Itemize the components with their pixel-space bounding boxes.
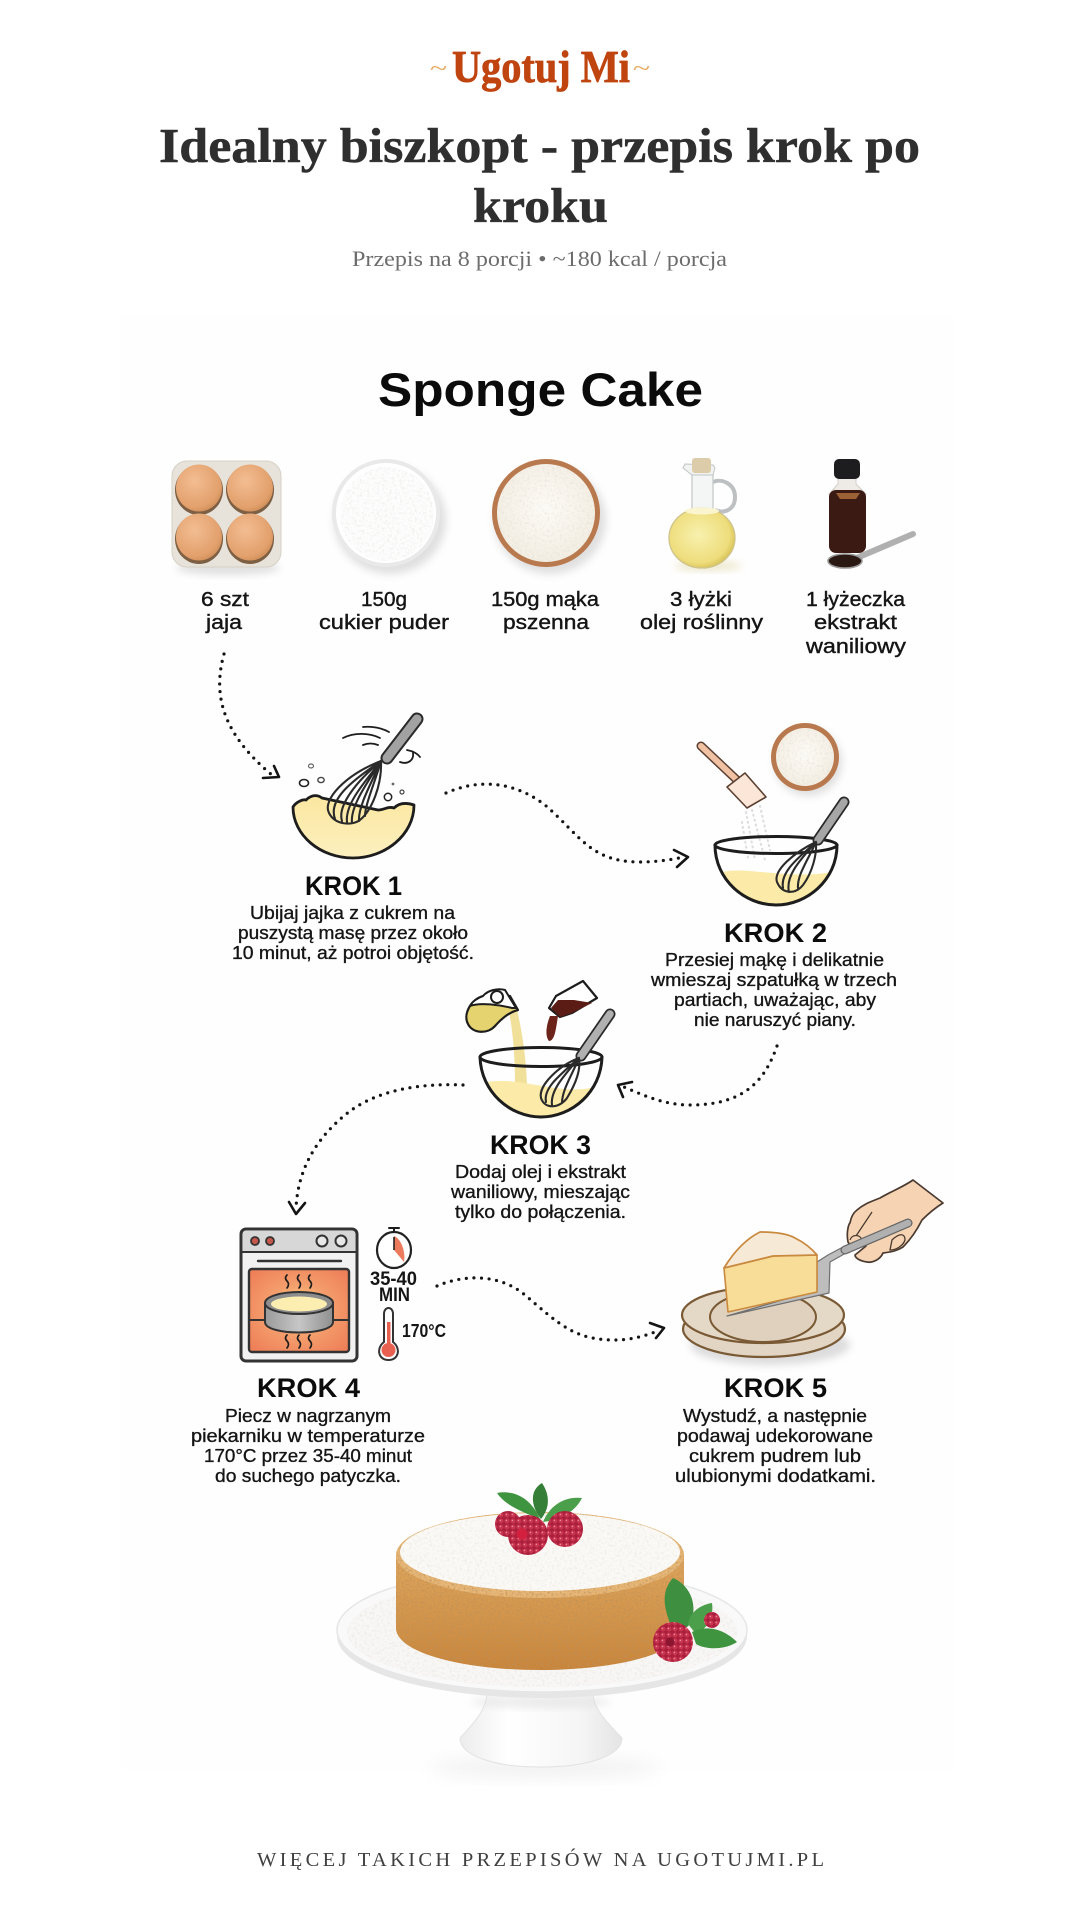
icon: timer 35-40 min: 35-40 <box>370 1269 417 1290</box>
step 3 text: Dodaj olej i ekstrakt <box>455 1161 626 1182</box>
arrow: step 2 to step 3 <box>618 1046 777 1105</box>
step 3 text: waniliowy, mieszając <box>450 1181 630 1202</box>
step 4 text: KROK 4 <box>257 1373 360 1403</box>
step 5 text: KROK 5 <box>724 1373 827 1403</box>
ingredient label: oil: olej roślinny <box>640 612 763 634</box>
step 5 text: podawaj udekorowane <box>677 1425 873 1446</box>
ingredient label: flour: 150g mąka <box>491 589 600 611</box>
step 5 text: Wystudź, a następnie <box>683 1405 867 1426</box>
icon: step 5 cake slice served by hand <box>682 1180 943 1365</box>
ingredient label: sugar: cukier puder <box>319 612 449 634</box>
arrow: step 4 to step 5 <box>437 1278 664 1340</box>
icon: vanilla extract with spoon <box>828 459 913 568</box>
step 1 text <box>232 871 474 963</box>
step 3 text: KROK 3 <box>490 1130 591 1160</box>
logo: Ugotuj Mi: Ugotuj Mi <box>452 41 630 92</box>
ingredient label: oil <box>640 589 763 634</box>
icon: timer 35-40 min: MIN <box>379 1285 410 1306</box>
ingredient label: vanilla: ekstrakt <box>814 612 898 634</box>
step 2 text: nie naruszyć piany. <box>694 1009 856 1030</box>
ingredient label: vanilla: waniliowy <box>805 636 906 658</box>
step 4 text: piekarniku w temperaturze <box>191 1425 425 1446</box>
title <box>159 118 920 233</box>
step 1 text: Ubijaj jajka z cukrem na <box>250 902 456 923</box>
step 3 text <box>450 1130 630 1222</box>
step 4 text: Piecz w nagrzanym <box>225 1405 391 1426</box>
icon: step 2 sifting flour into bowl <box>701 723 844 905</box>
step 3 text: tylko do połączenia. <box>455 1201 626 1222</box>
logo: Ugotuj Mi: ~ <box>633 56 650 82</box>
illustration: finished sponge cake on stand <box>337 1483 747 1776</box>
icon: step 1 whisk in batter <box>293 719 420 858</box>
icon: timer 35-40 min <box>370 1228 417 1306</box>
arrow: step 3 to step 4 <box>289 1085 463 1214</box>
panel heading: Sponge Cake <box>378 363 703 416</box>
step 4 text: 170°C przez 35-40 minut <box>204 1445 412 1466</box>
ingredient label: eggs <box>201 589 249 634</box>
ingredient label: sugar <box>319 589 449 634</box>
step 2 text <box>650 918 897 1030</box>
icon: step 4 oven <box>241 1229 357 1361</box>
icon: thermometer 170°C <box>379 1308 446 1360</box>
ingredient label: flour <box>491 589 600 634</box>
step 2 text: Przesiej mąkę i delikatnie <box>665 949 884 970</box>
step 2 text: partiach, uważając, aby <box>674 989 877 1010</box>
title: kroku <box>473 178 608 233</box>
ingredient label: flour: pszenna <box>503 612 590 634</box>
ingredient label: vanilla <box>805 589 906 658</box>
icon: oil bottle <box>669 458 742 571</box>
icon: thermometer 170°C: 170°C <box>402 1320 446 1341</box>
ingredient label: vanilla: 1 łyżeczka <box>806 589 906 611</box>
step 1 text: 10 minut, aż potroi objętość. <box>232 942 474 963</box>
step 4 text: do suchego patyczka. <box>215 1465 401 1486</box>
ingredient label: eggs: jaja <box>205 612 243 634</box>
icon: step 3 adding oil and vanilla <box>466 981 610 1117</box>
arrow: step 1 to step 2 <box>446 784 688 867</box>
step 5 text: cukrem pudrem lub <box>689 1445 861 1466</box>
footer: WIĘCEJ TAKICH PRZEPISÓW NA UGOTUJMI.PL <box>257 1847 824 1871</box>
ingredient label: oil: 3 łyżki <box>670 589 732 611</box>
step 5 text: ulubionymi dodatkami. <box>675 1465 876 1486</box>
step 1 text: KROK 1 <box>305 871 402 901</box>
step 2 text: KROK 2 <box>724 918 827 948</box>
arrow: ingredients to step 1 <box>220 654 279 778</box>
icon: bowl of wheat flour <box>492 459 606 574</box>
step 1 text: puszystą masę przez około <box>238 922 468 943</box>
subtitle: Przepis na 8 porcji • ~180 kcal / porcja <box>352 246 727 271</box>
icon: bowl of powdered sugar <box>332 459 446 574</box>
step 5 text <box>675 1373 876 1486</box>
icon: egg carton <box>172 461 281 575</box>
ingredient label: sugar: 150g <box>361 589 407 611</box>
ingredient label: eggs: 6 szt <box>201 589 249 611</box>
panel: sponge cake recipe <box>120 315 955 1776</box>
logo: Ugotuj Mi: ~ <box>430 56 447 82</box>
title: Idealny biszkopt - przepis krok po <box>159 118 920 173</box>
step 2 text: wmieszaj szpatułką w trzech <box>650 969 897 990</box>
step 4 text <box>191 1373 425 1486</box>
